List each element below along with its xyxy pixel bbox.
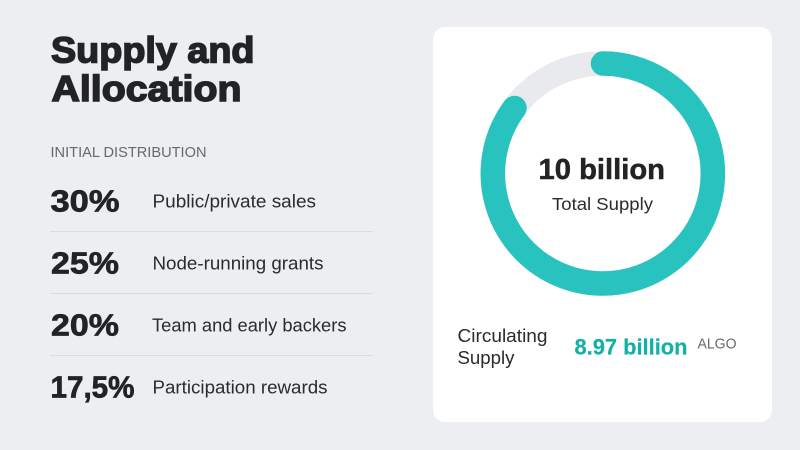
row: participation rewards: 17,5% xyxy=(50,370,134,404)
circulating supply value: 8.97 billion xyxy=(574,334,688,360)
unit: ALGO: ALGO xyxy=(698,336,736,352)
circulating supply label: Supply xyxy=(458,348,514,368)
title: Allocation xyxy=(52,68,242,109)
row: participation rewards: Participation rewards xyxy=(152,378,328,398)
title xyxy=(51,30,254,109)
row: public/private sales: Public/private sales xyxy=(152,192,316,212)
distribution list xyxy=(50,184,373,404)
row: participation rewards xyxy=(50,370,328,404)
circulating supply label xyxy=(458,326,548,368)
title: Supply and xyxy=(51,30,254,70)
row: node-running grants xyxy=(51,246,324,280)
row: node-running grants: 25% xyxy=(51,246,119,280)
row: public/private sales xyxy=(50,184,316,218)
row: node-running grants: Node-running grants xyxy=(152,254,324,274)
panel: supply card xyxy=(433,27,772,422)
subheading: initial distribution: INITIAL DISTRIBUTION xyxy=(50,145,206,161)
total supply value: 10 billion xyxy=(538,154,665,186)
row: team and early backers xyxy=(51,308,346,342)
row: team and early backers: 20% xyxy=(51,308,119,342)
total supply label: Total Supply xyxy=(552,194,653,214)
circulating supply label: Circulating xyxy=(458,326,548,346)
donut chart xyxy=(492,64,713,284)
row: team and early backers: Team and early backers xyxy=(152,316,346,336)
row: public/private sales: 30% xyxy=(50,184,120,218)
